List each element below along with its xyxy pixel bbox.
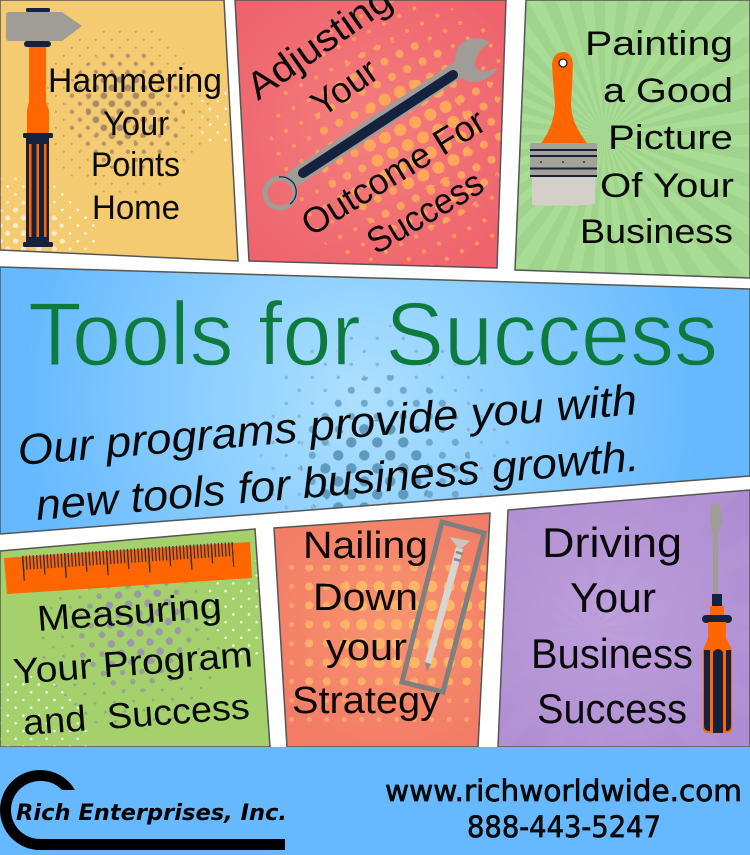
- icon: wrench: [265, 38, 498, 208]
- contact: website: www.richworldwide.com: [385, 774, 742, 808]
- text: measuring your program and success: and Success: [22, 685, 251, 743]
- contact: phone: 888-443-5247: [467, 810, 661, 844]
- text: nailing down your strategy: Down: [313, 577, 418, 619]
- panel: adjusting: [234, 0, 507, 269]
- text: adjusting your outcome for success: Success: [359, 162, 490, 262]
- text: painting a good picture of your business: a Good: [603, 72, 733, 110]
- panel: hammering: [0, 0, 239, 262]
- panel: driving: [497, 489, 750, 747]
- subtitle: [16, 376, 641, 530]
- text: nailing down your strategy: Nailing: [303, 525, 428, 567]
- icon: framed nail: [402, 522, 484, 692]
- text: adjusting your outcome for success: Outcome For: [294, 100, 493, 244]
- text: painting a good picture of your business: Painting: [585, 25, 733, 63]
- text: nailing down your strategy: [292, 525, 440, 722]
- footer band: [0, 747, 750, 855]
- icon: ruler: [4, 542, 252, 594]
- text: painting a good picture of your business: Of Your: [600, 167, 734, 205]
- icon: hammer: [6, 8, 82, 247]
- title: Tools for Success: [28, 285, 718, 385]
- logo: rich enterprises: [0, 770, 287, 850]
- text: measuring your program and success: [12, 585, 254, 743]
- text: hammering your points home: Points: [91, 146, 180, 184]
- text: painting a good picture of your business: Picture: [608, 119, 733, 157]
- text: painting a good picture of your business: Business: [580, 213, 733, 251]
- panel: nailing: [274, 513, 490, 747]
- panel: tools for success banner: [0, 266, 750, 535]
- text: hammering your points home: [48, 62, 222, 227]
- text: hammering your points home: Hammering: [48, 62, 222, 100]
- text: adjusting your outcome for success: [239, 0, 493, 262]
- panel: measuring: [0, 528, 271, 747]
- text: measuring your program and success: Measuring: [36, 585, 223, 639]
- text: painting a good picture of your business: [580, 25, 734, 251]
- icon: screwdriver: [702, 504, 732, 733]
- text: measuring your program and success: Your Program: [12, 634, 254, 692]
- text: nailing down your strategy: your: [326, 627, 407, 669]
- text: nailing down your strategy: Strategy: [292, 680, 440, 722]
- subtitle: new tools for business growth.: [34, 433, 641, 530]
- text: driving your business success: Success: [537, 685, 687, 732]
- subtitle: Our programs provide you with: [16, 376, 639, 475]
- panel: painting: [514, 0, 750, 279]
- text: adjusting your outcome for success: Your: [303, 50, 386, 125]
- text: driving your business success: [531, 519, 693, 732]
- icon: paint brush: [530, 52, 597, 206]
- text: hammering your points home: Your: [103, 105, 169, 143]
- text: driving your business success: Your: [570, 574, 656, 621]
- text: driving your business success: Driving: [542, 519, 682, 566]
- text: hammering your points home: Home: [92, 189, 180, 227]
- text: driving your business success: Business: [531, 630, 693, 677]
- logo: rich enterprises: Rich Enterprises, Inc.: [16, 801, 287, 826]
